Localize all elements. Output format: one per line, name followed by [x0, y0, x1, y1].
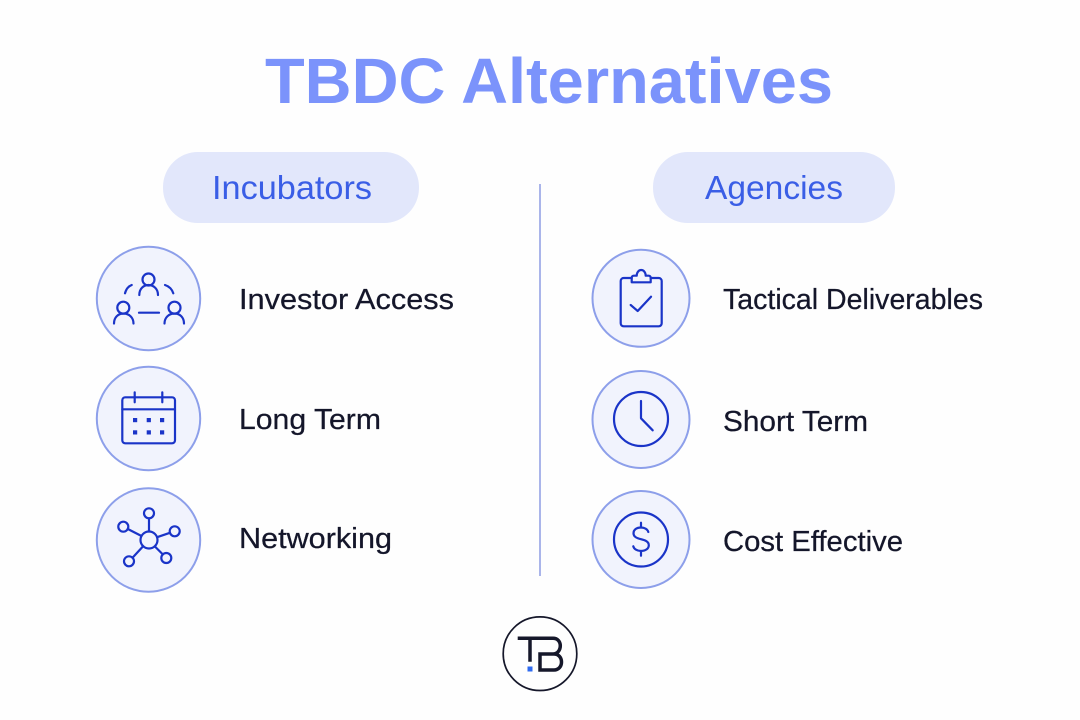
icon: clipboard check [621, 270, 662, 326]
item: Cost Effective [592, 491, 903, 588]
item: Long Term: Long Term [239, 404, 381, 436]
title: TBDC Alternatives [265, 45, 833, 117]
item: Long Term [97, 367, 381, 470]
icon: calendar [122, 392, 175, 443]
item: Investor Access: Investor Access [239, 284, 454, 316]
heading: Incubators: Incubators [212, 169, 372, 206]
item: Cost Effective: Cost Effective [723, 526, 903, 558]
item: Networking: Networking [239, 523, 392, 555]
panel: agencies [592, 152, 983, 588]
item: Short Term [592, 371, 868, 468]
heading: Incubators [163, 152, 419, 223]
icon: dollar coin [614, 512, 668, 566]
divider [539, 184, 541, 576]
icon: people network [114, 274, 184, 324]
icon: clock [614, 392, 668, 446]
logo: TB [503, 617, 577, 690]
heading: Agencies: Agencies [705, 169, 843, 206]
item: Tactical Deliverables [592, 250, 983, 347]
heading: Agencies [653, 152, 895, 223]
item: Networking [97, 488, 392, 592]
icon: hub network [118, 508, 180, 566]
item: Investor Access [97, 247, 454, 350]
panel: incubators [97, 152, 454, 592]
item: Short Term: Short Term [723, 406, 868, 438]
item: Tactical Deliverables: Tactical Deliverables [723, 284, 983, 316]
